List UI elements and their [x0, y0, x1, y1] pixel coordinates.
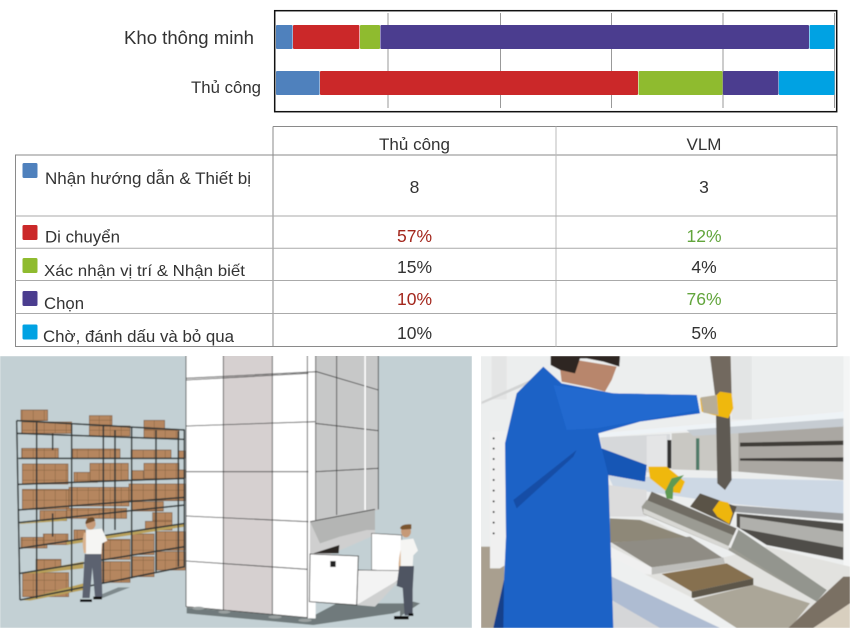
VLM shelves — [600, 434, 670, 477]
row: Xác nhận vị trí & Nhận biết: 15% — [397, 257, 432, 277]
strap — [710, 356, 732, 395]
row: Chờ, đánh dấu và bỏ qua: 5% — [691, 323, 717, 343]
chart frame — [275, 11, 837, 112]
row: Chọn: Chọn — [44, 295, 84, 313]
row: Chọn — [22, 289, 722, 313]
row: Nhận hướng dẫn & Thiết bị: Nhận hướng dẫn & Thiết bị — [45, 169, 251, 188]
row: Di chuyển — [22, 225, 722, 246]
head — [560, 360, 617, 392]
row: Nhận hướng dẫn & Thiết bị — [22, 163, 709, 197]
vertical lift module tower with drawer and worker — [186, 350, 420, 625]
row: Chờ, đánh dấu và bỏ qua: Chờ, đánh dấu và bỏ qua — [43, 328, 235, 346]
bar: Kho thông minh — [276, 25, 834, 49]
rack upright — [489, 546, 506, 569]
row: Chọn: 10% — [397, 289, 432, 309]
chart label: Thủ công: Thủ công — [191, 78, 261, 97]
row: Di chuyển: Di chuyển — [45, 228, 120, 246]
row: Xác nhận vị trí & Nhận biết — [22, 257, 717, 280]
table header: Thủ công: Thủ công — [379, 135, 450, 154]
row: Chờ, đánh dấu và bỏ qua — [22, 323, 717, 346]
row: Chọn: 76% — [686, 289, 722, 309]
row: Di chuyển: 57% — [397, 226, 432, 246]
lifted tray — [642, 492, 827, 602]
lab coat — [493, 367, 700, 628]
wall background — [481, 356, 844, 572]
row: Chờ, đánh dấu và bỏ qua: 10% — [397, 323, 432, 343]
row: Di chuyển: 12% — [686, 226, 722, 246]
chart label: Kho thông minh: Kho thông minh — [124, 27, 254, 48]
work table and trays — [610, 518, 850, 628]
bar: Thủ công — [276, 71, 834, 95]
chart: stacked bars comparison — [124, 11, 837, 112]
table: task breakdown — [16, 126, 837, 346]
row: Xác nhận vị trí & Nhận biết: Xác nhận vị trí & Nhận biết — [44, 263, 246, 280]
table header: VLM: VLM — [687, 135, 721, 154]
shelving rack with cartons and worker — [17, 410, 185, 602]
row: Xác nhận vị trí & Nhận biết: 4% — [691, 257, 717, 277]
row: Nhận hướng dẫn & Thiết bị: 3 — [699, 177, 709, 197]
gloves — [700, 392, 733, 418]
photo: worker lifting tray from VLM — [480, 356, 850, 628]
row: Nhận hướng dẫn & Thiết bị: 8 — [410, 177, 419, 197]
illustration: manual shelves vs vertical lift module — [0, 350, 472, 628]
